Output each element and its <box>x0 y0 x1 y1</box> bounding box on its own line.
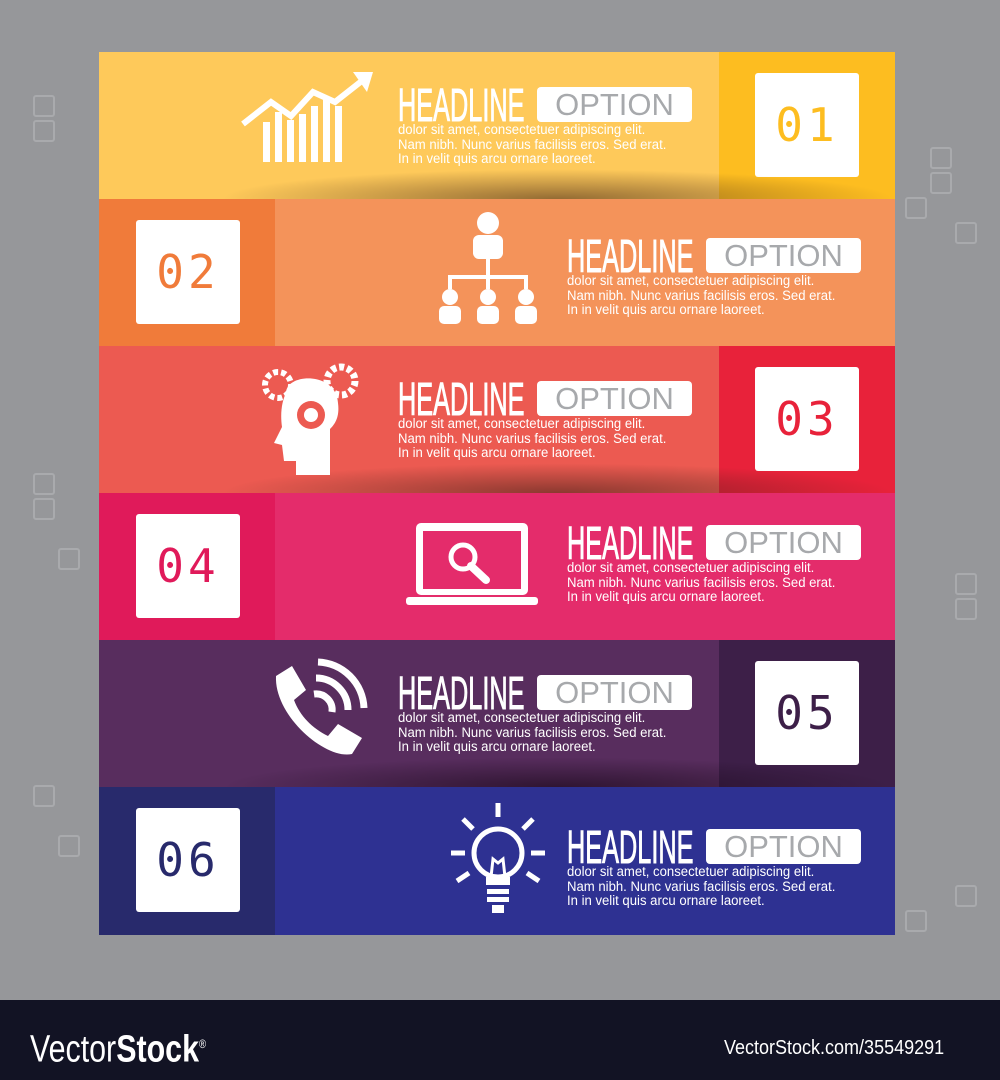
icon: light bulb <box>451 803 545 913</box>
text block: Nam nibh. Nunc varius facilisis eros. Sed erat. <box>398 430 666 446</box>
text block: HEADLINE <box>398 667 525 719</box>
row 4 <box>99 493 895 640</box>
footer url: VectorStock.com/35549291 <box>724 1037 944 1059</box>
text block: In in velit quis arcu ornare laoreet. <box>398 151 596 166</box>
row 6 <box>99 787 895 935</box>
text block: OPTION <box>555 381 674 416</box>
text block <box>567 821 861 908</box>
text block: HEADLINE <box>567 230 694 282</box>
text block: OPTION <box>555 87 674 122</box>
text block: OPTION <box>724 829 843 864</box>
text block: In in velit quis arcu ornare laoreet. <box>398 739 596 754</box>
number block 05: 05 <box>775 686 839 740</box>
number block 01 <box>719 52 895 199</box>
icon: laptop search <box>406 523 538 605</box>
text block: In in velit quis arcu ornare laoreet. <box>567 589 765 604</box>
number block 03: 03 <box>775 392 839 446</box>
text block: HEADLINE <box>567 517 694 569</box>
text block: In in velit quis arcu ornare laoreet. <box>567 893 765 908</box>
icon: head with gears <box>262 364 358 475</box>
number block 02 <box>99 199 275 346</box>
text block: OPTION <box>555 675 674 710</box>
text block: HEADLINE <box>567 821 694 873</box>
text block: dolor sit amet, consectetuer adipiscing elit. <box>567 864 814 879</box>
text block: HEADLINE <box>398 373 525 425</box>
number block 05 <box>719 640 895 787</box>
number block 06 <box>99 787 275 935</box>
row 5 <box>99 640 895 787</box>
text block: dolor sit amet, consectetuer adipiscing elit. <box>398 122 645 137</box>
text block <box>567 230 861 317</box>
text block: In in velit quis arcu ornare laoreet. <box>398 445 596 460</box>
text block: dolor sit amet, consectetuer adipiscing elit. <box>398 710 645 725</box>
footer <box>0 1000 1000 1080</box>
text block: Nam nibh. Nunc varius facilisis eros. Sed erat. <box>567 574 835 590</box>
text block: OPTION <box>724 525 843 560</box>
icon: chart arrow <box>241 72 373 162</box>
text block: dolor sit amet, consectetuer adipiscing elit. <box>567 560 814 575</box>
text block <box>398 373 692 460</box>
number block 01: 01 <box>775 98 839 152</box>
text block <box>567 517 861 604</box>
row 3 <box>99 346 895 493</box>
number block 03 <box>719 346 895 493</box>
text block: Nam nibh. Nunc varius facilisis eros. Sed erat. <box>398 724 666 740</box>
text block: HEADLINE <box>398 79 525 131</box>
number block 06: 06 <box>156 833 220 887</box>
icon: org chart <box>439 212 537 324</box>
text block: Nam nibh. Nunc varius facilisis eros. Sed erat. <box>567 878 835 894</box>
text block <box>398 79 692 166</box>
text block: Nam nibh. Nunc varius facilisis eros. Sed erat. <box>398 136 666 152</box>
text block: dolor sit amet, consectetuer adipiscing elit. <box>567 273 814 288</box>
text block: OPTION <box>724 238 843 273</box>
text block: Nam nibh. Nunc varius facilisis eros. Sed erat. <box>567 288 835 302</box>
row 2 <box>99 199 895 346</box>
text block: dolor sit amet, consectetuer adipiscing elit. <box>398 416 645 431</box>
footer logo: VectorStock® <box>30 1029 206 1071</box>
text block: In in velit quis arcu ornare laoreet. <box>567 302 765 317</box>
row 1 <box>99 52 895 199</box>
text block <box>398 667 692 754</box>
number block 02: 02 <box>156 245 220 299</box>
icon: phone <box>276 658 368 754</box>
number block 04: 04 <box>156 539 220 593</box>
number block 04 <box>99 493 275 640</box>
